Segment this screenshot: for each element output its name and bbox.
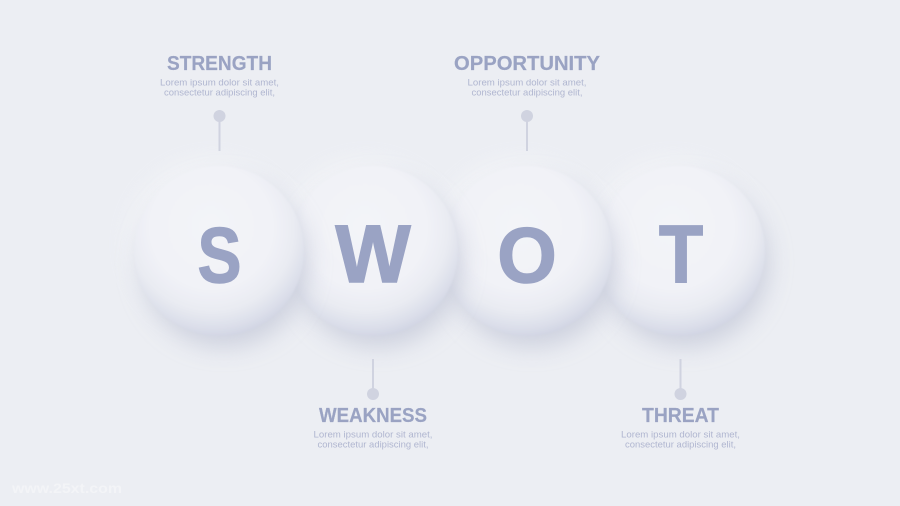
text: strength: Lorem ipsum dolor sit amet, bbox=[160, 78, 279, 88]
connector: weakness bbox=[367, 359, 379, 400]
callout: opportunity bbox=[454, 53, 601, 151]
letter O: O bbox=[497, 212, 557, 299]
text: strength bbox=[160, 78, 279, 98]
connector: threat bbox=[674, 359, 686, 400]
text: threat bbox=[621, 430, 740, 450]
sphere: O bbox=[436, 160, 616, 347]
heading: strength: STRENGTH bbox=[167, 53, 272, 75]
sphere: T bbox=[589, 160, 769, 347]
text: threat: Lorem ipsum dolor sit amet, bbox=[621, 430, 740, 440]
text: opportunity: Lorem ipsum dolor sit amet, bbox=[468, 78, 586, 88]
callout: weakness bbox=[314, 359, 432, 450]
text: weakness bbox=[314, 430, 432, 450]
connector: strength bbox=[214, 110, 226, 151]
text: weakness: Lorem ipsum dolor sit amet, bbox=[314, 430, 432, 440]
heading: threat: THREAT bbox=[642, 405, 719, 427]
text: strength: consectetur adipiscing elit, bbox=[164, 88, 275, 98]
letter T: T bbox=[659, 209, 703, 300]
letter S: S bbox=[198, 213, 241, 299]
text: weakness: consectetur adipiscing elit, bbox=[318, 440, 428, 450]
text: opportunity bbox=[468, 78, 586, 98]
sphere: S bbox=[128, 160, 308, 347]
text: opportunity: consectetur adipiscing elit, bbox=[472, 88, 582, 98]
watermark: www.25xt.com bbox=[11, 480, 122, 496]
sphere: W bbox=[282, 160, 462, 347]
heading: opportunity: OPPORTUNITY bbox=[454, 53, 601, 75]
text: threat: consectetur adipiscing elit, bbox=[625, 440, 736, 450]
heading: weakness: WEAKNESS bbox=[319, 405, 427, 427]
connector: opportunity bbox=[521, 110, 533, 151]
callout: strength bbox=[160, 53, 279, 151]
letter W: W bbox=[335, 209, 411, 300]
callout: threat bbox=[621, 359, 740, 450]
